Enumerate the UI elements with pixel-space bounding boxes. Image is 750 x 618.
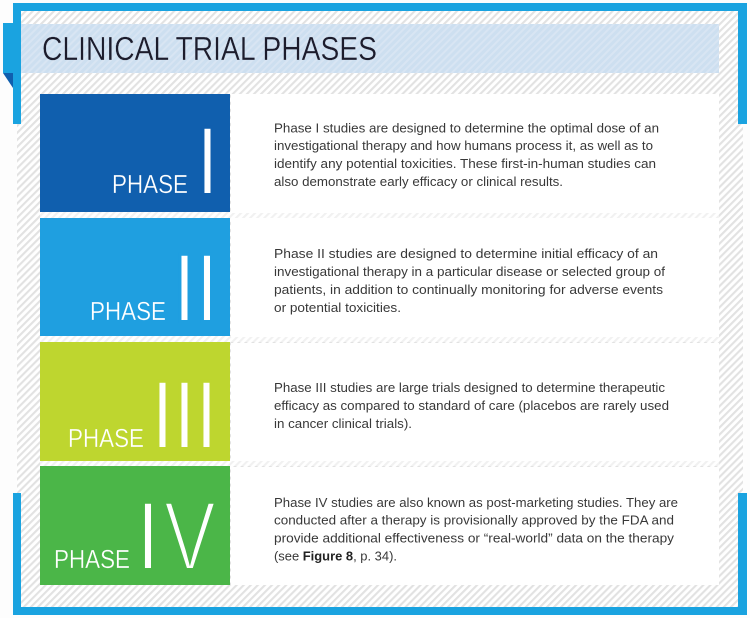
title: CLINICAL TRIAL PHASES: [42, 30, 377, 67]
numeral III: III: [149, 361, 220, 470]
description: phase IV: provide additional effectiveness or “real-world” data on the therapy: [274, 532, 675, 546]
frame: bottom corners: [13, 493, 747, 615]
label: phase III: PHASE: [68, 423, 144, 453]
description: phase III: efficacy as compared to standard of care (placebos are rarely used: [274, 399, 669, 413]
description: phase II: or potential toxicities.: [274, 301, 401, 315]
numeral IV: V: [164, 481, 216, 591]
description: phase II: [274, 247, 666, 315]
panel: phase III: [40, 342, 719, 470]
numeral IV: [134, 481, 216, 591]
description: phase I: [274, 122, 659, 189]
label: phase IV: PHASE: [54, 544, 130, 574]
description: phase II: patients, in addition to continually monitoring for adverse events: [274, 283, 663, 297]
description: phase II: Phase II studies are designed to determine initial efficacy of an: [274, 247, 658, 261]
description: phase IV: [274, 496, 678, 564]
description: phase I: Phase I studies are designed to determine the optimal dose of an: [274, 122, 659, 136]
panel: phase I: [40, 94, 719, 218]
description: phase IV: Phase IV studies are also known as post-marketing studies. They are: [274, 496, 678, 510]
panel: phase IV: [40, 466, 719, 591]
description: phase III: Phase III studies are large trials designed to determine therapeutic: [274, 381, 665, 395]
numeral II: II: [171, 234, 220, 343]
description: phase I: investigational therapy and how humans process it, as well as to: [274, 139, 653, 153]
description: phase I: also demonstrate early efficacy or clinical results.: [274, 175, 563, 189]
label: phase II: PHASE: [90, 296, 166, 326]
numeral IV: I: [134, 482, 161, 591]
description: phase IV: (see Figure 8, p. 34).: [274, 550, 397, 564]
description: phase IV: conducted after a therapy is provisionally approved by the FDA and: [274, 514, 674, 528]
description: phase I: identify any potential toxicities. These first-in-human studies can: [274, 157, 656, 171]
description: phase III: [274, 381, 669, 431]
label: phase I: PHASE: [112, 169, 188, 199]
header ribbon fold: [3, 23, 14, 88]
frame: top corners: [13, 3, 747, 124]
header band: [21, 24, 719, 73]
panel: phase II: [40, 218, 719, 343]
numeral I: I: [194, 107, 221, 216]
description: phase III: in cancer clinical trials).: [274, 417, 412, 431]
description: phase II: investigational therapy in a particular disease or selected group of: [274, 265, 666, 279]
